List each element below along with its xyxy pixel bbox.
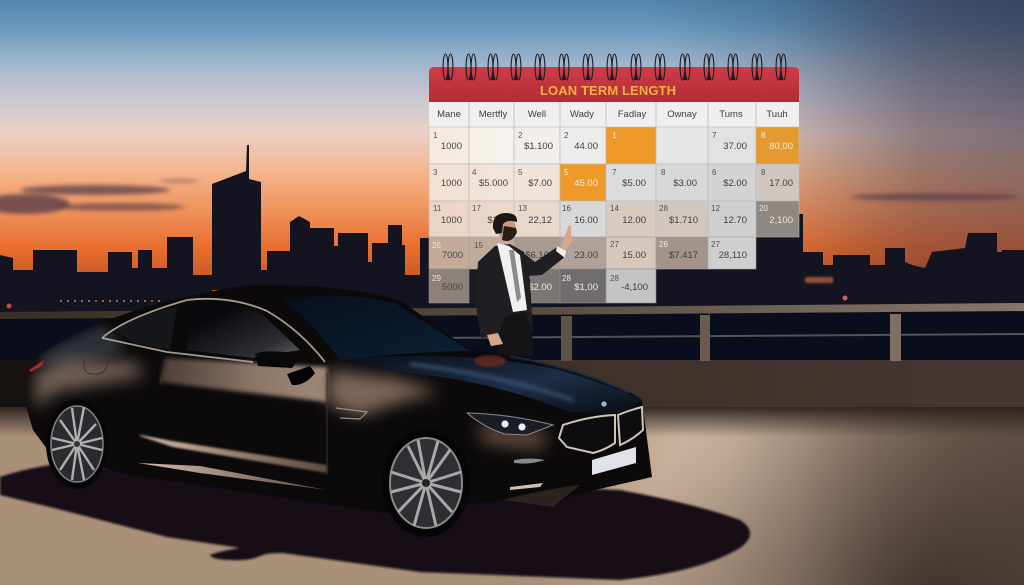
calendar: 26 [432, 241, 441, 250]
rear tail light [29, 360, 44, 372]
calendar: 7000 [442, 250, 463, 261]
front side window [187, 301, 300, 358]
calendar: 26 [659, 240, 668, 249]
weekday header row: Ownay [667, 109, 697, 120]
trousers [497, 312, 534, 356]
calendar [429, 54, 799, 303]
terrace dark gap behind railing [0, 312, 1024, 362]
calendar: 7 [712, 131, 717, 140]
calendar: 15 [474, 241, 483, 250]
side mirror [255, 351, 298, 368]
calendar: 28 [610, 274, 619, 283]
pointing arm and hand [522, 225, 573, 276]
man in suit pointing at the calendar [475, 213, 573, 356]
side vent [336, 408, 367, 419]
calendar red header with title [429, 67, 799, 102]
calendar: $2.00 [528, 282, 552, 293]
weekday header row: Mane [437, 109, 461, 120]
calendar: 14 [610, 204, 619, 213]
calendar: 22,12 [528, 215, 552, 226]
calendar: 2 [564, 131, 569, 140]
fuel door and door lines [84, 357, 327, 475]
calendar: 23.00 [574, 250, 598, 261]
calendar: 44.00 [574, 141, 598, 152]
calendar row 4 [429, 237, 756, 269]
calendar: 5000 [442, 282, 463, 293]
calendar: 80,00 [769, 141, 793, 152]
calendar: 45.00 [574, 178, 598, 189]
calendar: 1 [612, 131, 617, 140]
shirt and tie [497, 243, 527, 312]
calendar: 17 [472, 204, 481, 213]
spiral binding rings [443, 54, 786, 80]
clouds [0, 179, 1020, 214]
ground [0, 407, 1024, 585]
calendar: 8 [661, 168, 666, 177]
calendar: $1.100 [524, 141, 553, 152]
calendar: 15.00 [622, 250, 646, 261]
calendar: 2 [518, 131, 523, 140]
calendar: 8 [761, 131, 766, 140]
calendar: 1000 [441, 215, 462, 226]
calendar: 5 [564, 168, 569, 177]
calendar: $5.00 [622, 178, 646, 189]
calendar: $1.710 [669, 215, 698, 226]
calendar: 12.70 [723, 215, 747, 226]
calendar: 28 [659, 204, 668, 213]
railing [0, 303, 1024, 361]
front bumper details [503, 458, 580, 507]
calendar red header with title: LOAN TERM LENGTH [540, 83, 676, 98]
calendar: 8 [761, 168, 766, 177]
calendar: 6 [712, 168, 717, 177]
rear wheel [46, 399, 108, 489]
lower hand [487, 333, 503, 346]
calendar: 16.00 [574, 215, 598, 226]
calendar: $6.10 [525, 250, 549, 261]
car body [25, 285, 652, 515]
calendar: 1000 [441, 178, 462, 189]
chrome window trim [102, 299, 325, 362]
calendar: $7.00 [528, 178, 552, 189]
calendar: 28,110 [719, 250, 747, 261]
car shadow [0, 465, 750, 580]
hood reflection of the man [474, 355, 506, 367]
weekday header row: Fadlay [618, 109, 647, 120]
weekday header row: Tums [719, 109, 743, 120]
calendar row 2 [429, 164, 799, 201]
calendar: 1 [433, 131, 438, 140]
calendar: 28 [562, 274, 571, 283]
city lights [6, 277, 848, 308]
calendar: $2 [487, 215, 498, 226]
calendar: 5 [518, 168, 523, 177]
calendar: 16 [562, 204, 571, 213]
calendar: 2,100 [769, 215, 793, 226]
calendar row 5 [429, 269, 656, 303]
calendar: 27 [610, 240, 619, 249]
calendar: -4,100 [621, 282, 648, 293]
calendar: 1000 [441, 141, 462, 152]
calendar: 4 [472, 168, 477, 177]
weekday header row: Tuuh [766, 109, 788, 120]
rear side window [115, 307, 177, 350]
calendar: 20 [759, 204, 768, 213]
calendar: $2.00 [723, 178, 747, 189]
calendar row 1 [429, 127, 799, 164]
weekday header row [429, 102, 799, 127]
calendar: 12 [711, 204, 720, 213]
body highlights [35, 325, 642, 490]
calendar: 17.00 [769, 178, 793, 189]
calendar row 3 [429, 201, 799, 237]
weekday header row: Mertfly [479, 109, 508, 120]
car [25, 285, 652, 537]
city skyline [0, 145, 1024, 320]
front kidney grille [559, 401, 643, 453]
wall [0, 360, 1024, 408]
calendar: 13 [518, 204, 527, 213]
calendar: 27 [711, 240, 720, 249]
calendar: 7 [612, 168, 617, 177]
front wheel [382, 429, 470, 537]
weekday header row: Wady [570, 109, 594, 120]
calendar: 12.00 [622, 215, 646, 226]
head [493, 213, 517, 241]
calendar: 3 [433, 168, 438, 177]
calendar: $3.00 [673, 178, 697, 189]
weekday header row: Well [528, 109, 546, 120]
calendar: 11 [433, 204, 442, 213]
calendar: $7.417 [669, 250, 698, 261]
background: sunset sky [0, 0, 1024, 305]
windshield [283, 296, 470, 360]
calendar: 29 [432, 274, 441, 283]
jacket [475, 244, 533, 338]
calendar: $5.000 [479, 178, 508, 189]
license plate [592, 447, 636, 475]
headlight [467, 413, 553, 435]
calendar: 37.00 [723, 141, 747, 152]
calendar: $1,00 [574, 282, 598, 293]
